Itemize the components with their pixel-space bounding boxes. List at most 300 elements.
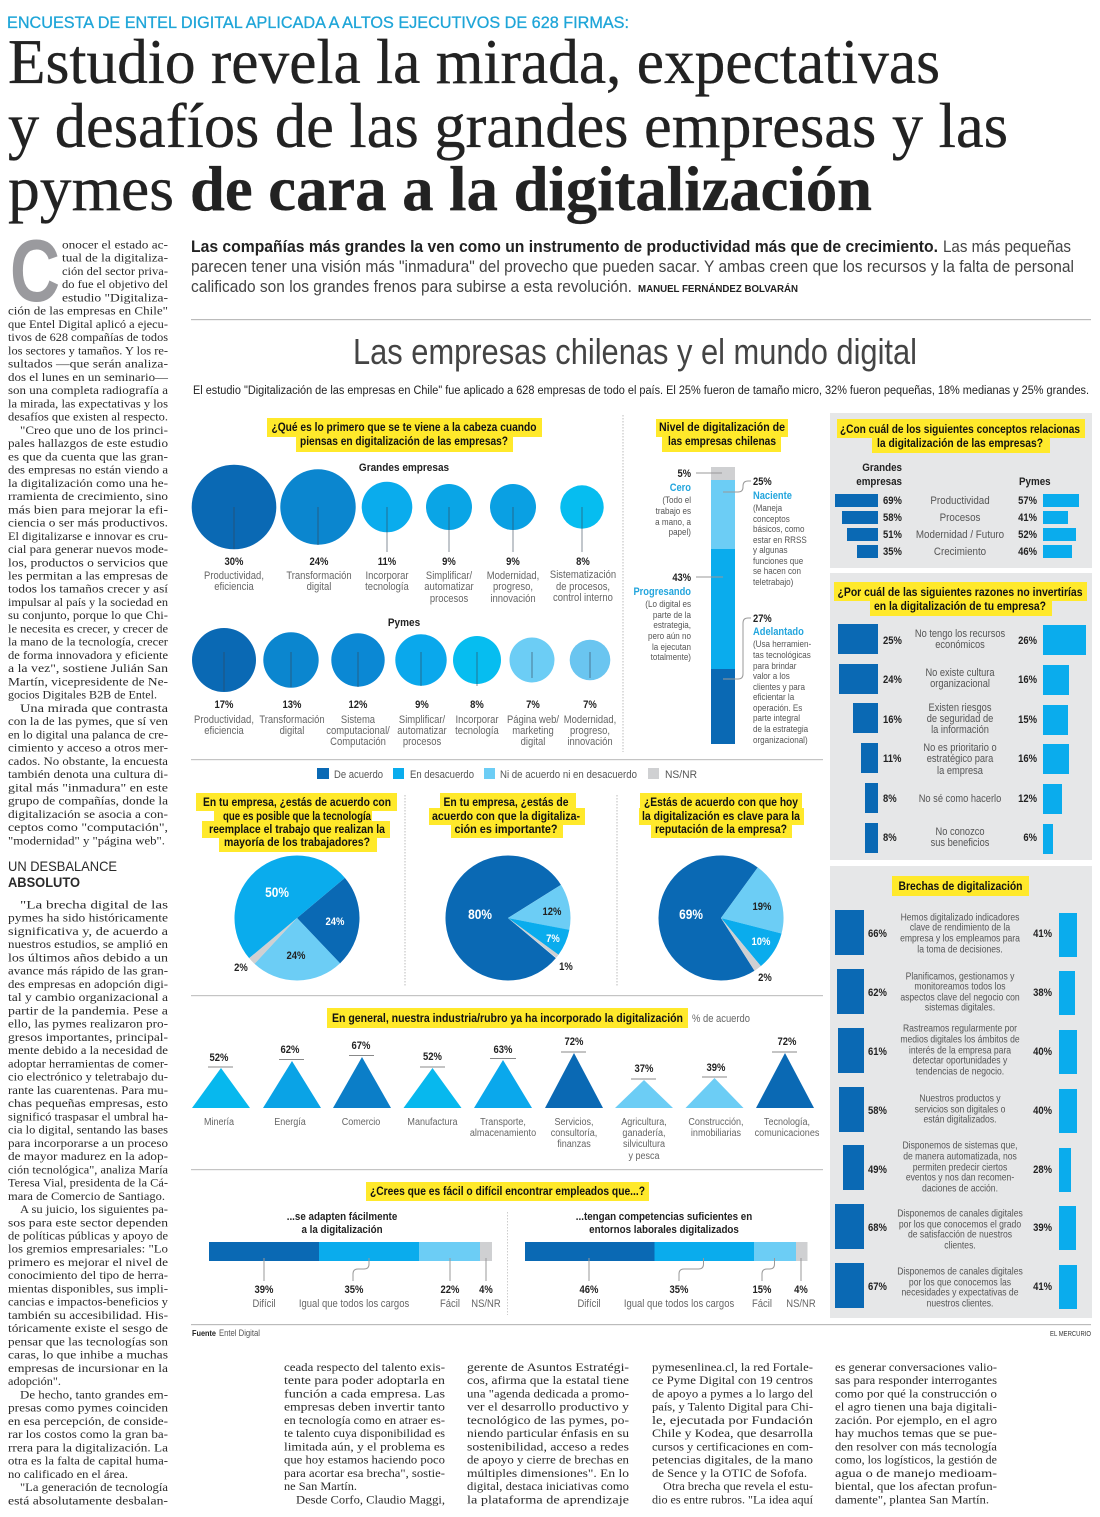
gap descriptions: Hemos digitalizado indicadores (901, 912, 1020, 923)
right stacked bar: 15% (753, 1284, 771, 1296)
intro deck: MANUEL FERNÁNDEZ BOLVARÁN (638, 282, 798, 295)
values and labels: 58% (883, 512, 902, 524)
labels right: 25% (753, 476, 772, 488)
article column 2: ne San Martín. (284, 1479, 357, 1493)
values and labels: 72% (778, 1036, 796, 1048)
question (327, 1008, 750, 1028)
left article column: Una mirada que contrasta (20, 701, 169, 715)
article column 3: de apoyo y cierre de brechas en (467, 1453, 629, 1467)
labels right: (Usa herramien- (753, 638, 811, 649)
values and labels: 62% (281, 1044, 299, 1056)
left article column: sultados —que serán analiza- (8, 357, 168, 371)
left article column: conocimiento del tipo de herra- (8, 1268, 168, 1282)
article column 5: hay muchos temas que se pue- (835, 1426, 997, 1440)
left article column: des empresas en adopción digi- (8, 977, 168, 991)
left stacked bar: NS/NR (471, 1298, 501, 1310)
values and labels: 52% (1018, 529, 1037, 541)
article column 2: tente para poder adoptarla en (284, 1373, 445, 1387)
values: 67% (868, 1281, 887, 1293)
left article column: todos los tamaños crecer y así (8, 582, 169, 596)
pymes labels: innovación (567, 736, 613, 748)
column heads: empresas (856, 475, 902, 488)
values: 12% (1018, 793, 1037, 805)
gap descriptions: servicios son digitales o (915, 1104, 1005, 1115)
left article column: la digitalización como una he- (8, 476, 168, 490)
values and labels: comunicaciones (755, 1127, 819, 1139)
left article column: des empresas no están viendo a (8, 463, 169, 477)
panel: brechas (830, 866, 1092, 1318)
triangles (192, 1052, 814, 1108)
article column 5: como por qué la construcción o (835, 1386, 997, 1400)
values and labels: Comercio (342, 1116, 381, 1128)
values and labels: 69% (883, 495, 902, 507)
pymes labels: 17% (215, 699, 233, 711)
pymes labels: 9% (415, 699, 429, 711)
pie labels: 2% (234, 962, 248, 974)
right stacked bar: Igual que todos los cargos (624, 1298, 734, 1310)
question (366, 1182, 649, 1201)
left article column: que Entel Digital aplicó a ejecu- (8, 317, 168, 331)
gap descriptions: clientes. (944, 1240, 976, 1251)
labels right: se hacen con (753, 565, 801, 576)
pymes labels: tecnología (455, 725, 499, 737)
grandes empresas labels: eficiencia (214, 581, 254, 593)
legend: NS/NR (665, 769, 697, 781)
question: ción es importante? (454, 824, 558, 836)
pie labels (679, 901, 772, 984)
gap descriptions: por los que conocemos las (909, 1277, 1011, 1288)
grandes empresas labels: procesos (430, 593, 468, 605)
gap descriptions: daciones de acción. (922, 1183, 998, 1194)
left article column: onocer el estado ac- (62, 238, 168, 252)
gap descriptions: detectar oportunidades y (913, 1055, 1008, 1066)
article column 5: sas para responder interrogantes (835, 1373, 997, 1387)
grandes empresas labels: Simplificar/ (426, 570, 472, 582)
labels right: (Maneja (753, 502, 782, 513)
labels right: 27% (753, 613, 772, 625)
article column 3 (467, 1360, 629, 1506)
grandes empresas labels: 9% (506, 556, 520, 568)
values and labels: ganadería, (622, 1127, 666, 1139)
labels left: papel) (669, 526, 691, 537)
chart: nivel de digitalización (633, 419, 811, 745)
values: 66% (868, 928, 887, 940)
labels right: de la estrategia (753, 723, 808, 734)
subheading: ABSOLUTO (8, 874, 80, 890)
question: las empresas chilenas (668, 436, 776, 448)
values: 41% (1033, 1281, 1052, 1293)
pymes labels: digital (521, 736, 545, 748)
question: ¿Crees que es fácil o difícil encontrar empleados que...? (370, 1186, 645, 1198)
pymes labels: Productividad, (194, 714, 254, 726)
grandes empresas labels: control interno (553, 592, 613, 604)
reason labels: No es prioritario o (923, 742, 997, 754)
right stacked bar (525, 1210, 816, 1310)
reason labels (915, 628, 1005, 849)
pie labels: 69% (679, 906, 703, 922)
pie labels: 24% (326, 916, 344, 928)
pie labels (468, 906, 573, 973)
heading: Brechas de digitalización (898, 881, 1022, 893)
pymes labels: Sistema (341, 714, 375, 726)
left article column: ción de las empresas en Chile" (8, 304, 168, 318)
question (656, 419, 788, 452)
legend (317, 768, 697, 781)
left article column (8, 221, 169, 1507)
left article column: empresas de incursionar en la (8, 1361, 169, 1375)
labels right: tas tecnológicas (753, 649, 811, 660)
left article column: mente debido a la necesidad de (8, 1043, 168, 1057)
values: 8% (883, 832, 897, 844)
left article column: chas pequeñas empresas, esto (8, 1096, 168, 1110)
values: 11% (883, 753, 901, 765)
values and labels: 35% (883, 546, 902, 558)
grandes empresas labels: 9% (442, 556, 456, 568)
source: Entel Digital (219, 1328, 260, 1338)
pie labels: 24% (287, 950, 305, 962)
left article column: en lo digital una palanca de cre- (8, 727, 168, 741)
values: 62% (868, 987, 887, 999)
left article column: estudio "Digitaliza- (62, 290, 168, 304)
drop cap: C (10, 221, 60, 320)
pie labels: 7% (546, 933, 560, 945)
gap descriptions: Disponemos de canales digitales (897, 1266, 1023, 1277)
pymes labels: digital (280, 725, 304, 737)
left stacked bar: 22% (441, 1284, 459, 1296)
gap descriptions: Rastreamos regularmente por (903, 1023, 1017, 1034)
left article column: su conjunto, porque lo que Chi- (8, 608, 168, 622)
labels right: parte integral (753, 712, 800, 723)
pymes labels (194, 699, 616, 748)
left article column: pymes ha sido históricamente (8, 911, 168, 925)
values: 68% (868, 1222, 887, 1234)
values: 28% (1033, 1164, 1052, 1176)
left article column: pales hallazgos de este estudio (8, 436, 168, 450)
article column 3: digital, destaca iniciativas como (467, 1479, 629, 1493)
pie labels: 1% (559, 961, 573, 973)
question: Nivel de digitalización de (659, 422, 785, 434)
left article column: desafíos que existen al respecto. (8, 410, 168, 424)
chart: industria triangles (192, 1008, 819, 1162)
article column 4: Chile y Kodea, que desarrolla (652, 1426, 814, 1440)
gap descriptions: de satisfacción de nuestros (908, 1229, 1012, 1240)
values and labels: 51% (883, 529, 902, 541)
chart: empleados (209, 1182, 816, 1315)
bars (838, 624, 1086, 854)
question (639, 793, 804, 838)
labels left: totalmente) (651, 651, 691, 662)
labels right: Adelantado (753, 626, 804, 638)
article column 4: pymesenlinea.cl, la red Fortale- (652, 1360, 813, 1374)
left article column: sos para este sector dependen (8, 1215, 168, 1229)
legend: En desacuerdo (410, 769, 474, 781)
left article column: rante las cuarentenas. Para mu- (8, 1083, 168, 1097)
pymes labels: Transformación (259, 714, 325, 726)
grandes empresas labels: 30% (225, 556, 243, 568)
left article column: cimiento y acceso a otros mer- (8, 741, 168, 755)
left article column: cados. No obstante, la encuesta (8, 754, 169, 768)
grandes empresas labels: automatizar (424, 581, 474, 593)
pie labels: 80% (468, 906, 492, 922)
left article column: digitalización se asocia a con- (8, 807, 168, 821)
left stacked bar: 39% (255, 1284, 273, 1296)
legend: Ni de acuerdo ni en desacuerdo (500, 769, 637, 781)
labels right: organizacional) (753, 734, 808, 745)
reason labels: estratégico para (927, 753, 994, 765)
left article column: partir de la pandemia. Pese a (8, 1003, 169, 1017)
left article column: pensar que las tecnologías son (8, 1334, 168, 1348)
labels left: Cero (670, 482, 691, 494)
gap descriptions: de manera automatizada, nos (903, 1151, 1017, 1162)
column heads: Grandes (862, 461, 902, 474)
values: 26% (1018, 635, 1037, 647)
grandes empresas labels: 11% (378, 556, 396, 568)
question (834, 582, 1087, 616)
gap descriptions: empresa y los empleamos para (900, 933, 1021, 944)
gap descriptions: interés de la empresa para (909, 1045, 1012, 1056)
pymes labels: Simplificar/ (399, 714, 445, 726)
left article column: "La generación de tecnología (20, 1480, 169, 1494)
pymes labels: Modernidad, (564, 714, 616, 726)
left stacked bar: a la digitalización (301, 1223, 383, 1236)
left article column: cio electrónico y teletrabajo du- (8, 1070, 168, 1084)
values and labels: Transporte, (480, 1116, 526, 1128)
grandes empresas circles (192, 465, 604, 552)
reason labels: la empresa (937, 765, 983, 777)
left stacked bar: ...se adapten fácilmente (287, 1210, 397, 1223)
grandes empresas labels: progreso, (493, 581, 533, 593)
left article column: rramienta de crecimiento, sino (8, 489, 168, 503)
gap descriptions: sistemas digitales. (925, 1002, 995, 1013)
left article column: los gremios empresariales: "Lo (8, 1242, 168, 1256)
labels left: (Lo digital es (645, 598, 692, 609)
right stacked bar: 46% (580, 1284, 598, 1296)
left article column: los, productos o servicios que (8, 555, 168, 569)
reason labels: No tengo los recursos (915, 628, 1005, 640)
values: 40% (1033, 1046, 1052, 1058)
reason labels: No conozco (935, 826, 985, 838)
values: 25% (883, 635, 902, 647)
left stacked bar: 4% (479, 1284, 493, 1296)
pie labels: 10% (752, 936, 770, 948)
labels right: Naciente (753, 490, 792, 502)
grandes empresas labels: Transformación (286, 570, 352, 582)
grandes empresas labels: Sistematización (550, 569, 616, 581)
values and labels: 72% (565, 1036, 583, 1048)
values and labels: 39% (707, 1062, 725, 1074)
article column 2: te talento cuya disponibilidad es (284, 1426, 445, 1440)
values and labels: almacenamiento (470, 1127, 537, 1139)
labels right: estar en RRSS (753, 534, 807, 545)
left article column: avance más rápido de las gran- (8, 964, 168, 978)
article column 3: tecnológico de las pymes, po- (467, 1413, 629, 1427)
article column 5: damente", plantea San Martín. (835, 1492, 989, 1506)
article column 2: Desde Corfo, Claudio Maggi, (296, 1492, 445, 1506)
left article column: ceptos como "computación", (8, 820, 168, 834)
article column 2: para acortar esa brecha", sostie- (284, 1466, 445, 1480)
left article column: rrera para la digitalización. La (8, 1440, 169, 1454)
gap descriptions: medios digitales los ámbitos de (900, 1034, 1020, 1045)
grandes empresas labels: innovación (490, 593, 536, 605)
left article column: más bien para mejorar la efi- (8, 502, 168, 516)
values (868, 928, 1052, 1293)
right stacked bar: Difícil (577, 1298, 601, 1310)
left article column: tivos de 628 compañías de todos (8, 330, 168, 344)
left article column: los últimos años debido a un (8, 950, 168, 964)
left article column: adopción". (8, 1374, 61, 1388)
pie labels: 12% (543, 906, 561, 918)
article column 4: le, ejecutada por Fundación (652, 1413, 813, 1427)
left article column: presas como pymes coinciden (8, 1401, 168, 1415)
intro deck: Las compañías más grandes la ven como un instrumento de productividad más que de crecimiento. (191, 238, 938, 256)
pymes labels: marketing (512, 725, 554, 737)
intro deck: Las más pequeñas (943, 238, 1071, 256)
gap descriptions: Disponemos de canales digitales (897, 1208, 1023, 1219)
intro deck (191, 238, 1074, 296)
left article column: impulsar al país y la sociedad en (8, 595, 168, 609)
labels right: teletrabajo) (753, 576, 793, 587)
left article column: a la vez", sostiene Julián San (8, 661, 168, 675)
right stacked bar: ...tengan competencias suficientes en (576, 1210, 752, 1223)
chart: primero que viene a la cabeza (192, 418, 616, 748)
values and labels: Agricultura, (621, 1116, 667, 1128)
values: 16% (1018, 753, 1037, 765)
question: % de acuerdo (692, 1013, 750, 1025)
values: 16% (1018, 674, 1037, 686)
left article column: cancias e impactos-beneficios y (8, 1295, 168, 1309)
values: 39% (1033, 1222, 1052, 1234)
values and labels: Tecnología, (764, 1116, 810, 1128)
left article column: do fue el objetivo del (62, 277, 169, 291)
left article column: significó traspasar el umbral ha- (8, 1109, 168, 1123)
grandes empresas labels: digital (307, 581, 331, 593)
pymes labels: 13% (283, 699, 301, 711)
pymes labels: progreso, (570, 725, 610, 737)
article column 3: ver el desarrollo productivo y (467, 1400, 629, 1414)
title (8, 26, 1008, 224)
values and labels: 63% (494, 1044, 512, 1056)
labels left: a mano, a (655, 516, 691, 527)
values and labels: Manufactura (407, 1116, 458, 1128)
gap descriptions: Disponemos de sistemas que, (902, 1140, 1018, 1151)
article column 2: limitada aún, y el problema es (284, 1439, 445, 1453)
grandes empresas labels: Incorporar (365, 570, 409, 582)
article column 2: función a cada empresa. Las (284, 1386, 445, 1400)
values and labels: 41% (1018, 512, 1037, 524)
source (192, 1328, 260, 1338)
grandes empresas labels: 24% (310, 556, 328, 568)
question (837, 419, 1085, 453)
left article column: de forma innovadora y eficiente (8, 648, 168, 662)
article column 3: múltiples dimensiones". En lo (467, 1466, 629, 1480)
reason labels: No sé como hacerlo (919, 793, 1002, 805)
grandes empresas labels: de procesos, (556, 581, 610, 593)
left article column: El digitalizarse e innovar es cru- (8, 529, 168, 543)
subheading (8, 858, 117, 890)
article column 4: ce Pyme Digital con 19 centros (652, 1373, 813, 1387)
left article column: también su accesibilidad. His- (8, 1308, 168, 1322)
pymes labels: procesos (403, 736, 441, 748)
question: reemplace el trabajo que realizan la (209, 824, 386, 836)
pie chart 2: digitalización importante (429, 793, 585, 973)
title: y desafíos de las grandes empresas y las (8, 90, 1008, 161)
labels left: pero aún no (648, 630, 691, 641)
values and labels: silvicultura (623, 1138, 666, 1150)
left stacked bar: Fácil (440, 1298, 460, 1310)
grandes empresas labels: tecnología (365, 581, 409, 593)
values and labels: 67% (352, 1040, 370, 1052)
grandes empresas labels: 8% (576, 556, 590, 568)
values: 38% (1033, 987, 1052, 999)
values: 6% (1023, 832, 1037, 844)
pie chart 3: reputación (639, 793, 804, 984)
question (196, 793, 397, 852)
left stacked bar (209, 1210, 501, 1310)
left article column: tal y cambio organizacional a (8, 990, 169, 1004)
values and labels: Servicios, (554, 1116, 594, 1128)
left article column: con la de las pymes, que sí ven (8, 714, 168, 728)
left article column: rar los costos como la gran ba- (8, 1427, 168, 1441)
left article column: son una completa radiografía a (8, 383, 169, 397)
question: mayoría de los trabajadores? (224, 837, 370, 849)
values and labels: y pesca (628, 1150, 660, 1162)
labels right: básicos, como (753, 523, 805, 534)
right stacked bar: entornos laborales digitalizados (589, 1223, 739, 1236)
article column 5: zación. Por ejemplo, en el agro (835, 1413, 997, 1427)
left article column: caras, lo que inhibe a muchas (8, 1348, 168, 1362)
left article column: le necesita es crecer, y crecer de (8, 622, 168, 636)
labels right: operación. Es (753, 702, 803, 713)
values: 40% (1033, 1105, 1052, 1117)
title: Estudio revela la mirada, expectativas (8, 26, 940, 97)
question: en la digitalización de tu empresa? (874, 601, 1046, 613)
left article column: los sectores y tamaños. Y los re- (8, 343, 168, 357)
values and labels: 52% (423, 1051, 442, 1063)
values: 49% (868, 1164, 887, 1176)
labels right: funciones que (753, 555, 803, 566)
article column 3: cos, afirma que la estatal tiene (467, 1373, 629, 1387)
column heads: Pymes (1019, 475, 1051, 488)
pie labels (234, 884, 344, 974)
pymes labels: 7% (526, 699, 540, 711)
left article column: Teresa Vial, presidenta de la Cá- (8, 1176, 168, 1190)
left article column: primero es mejorar el nivel de (8, 1255, 168, 1269)
labels left: 5% (678, 468, 691, 480)
article column 3: una "agenda dedicada a promo- (467, 1386, 629, 1400)
right stacked bar: 4% (794, 1284, 808, 1296)
values and labels: Modernidad / Futuro (916, 528, 1004, 541)
left article column: adoptar herramientas de comer- (8, 1056, 168, 1070)
panel: conceptos (830, 413, 1092, 568)
left article column: en esa percepción, de conside- (8, 1414, 168, 1428)
reason labels: la información (931, 724, 989, 736)
gap descriptions: necesidades y expectativas de (902, 1287, 1018, 1298)
reason labels: sus beneficios (931, 837, 989, 849)
left article column: "Creo que uno de los princi- (20, 423, 168, 437)
left stacked bar: Igual que todos los cargos (299, 1298, 409, 1310)
values and labels: Procesos (940, 511, 980, 524)
source: Fuente (192, 1328, 216, 1338)
values and labels: Minería (204, 1116, 235, 1128)
values (883, 635, 1037, 844)
left stacked bar: 35% (345, 1284, 363, 1296)
article column 4: cursos y certificaciones en com- (652, 1439, 813, 1453)
pymes labels: Computación (330, 736, 386, 748)
question: En general, nuestra industria/rubro ya ha incorporado la digitalización (332, 1013, 683, 1025)
pymes circles (192, 628, 610, 692)
gap descriptions: la toma de decisiones. (917, 944, 1003, 955)
gap descriptions: Nuestros productos y (919, 1093, 1001, 1104)
